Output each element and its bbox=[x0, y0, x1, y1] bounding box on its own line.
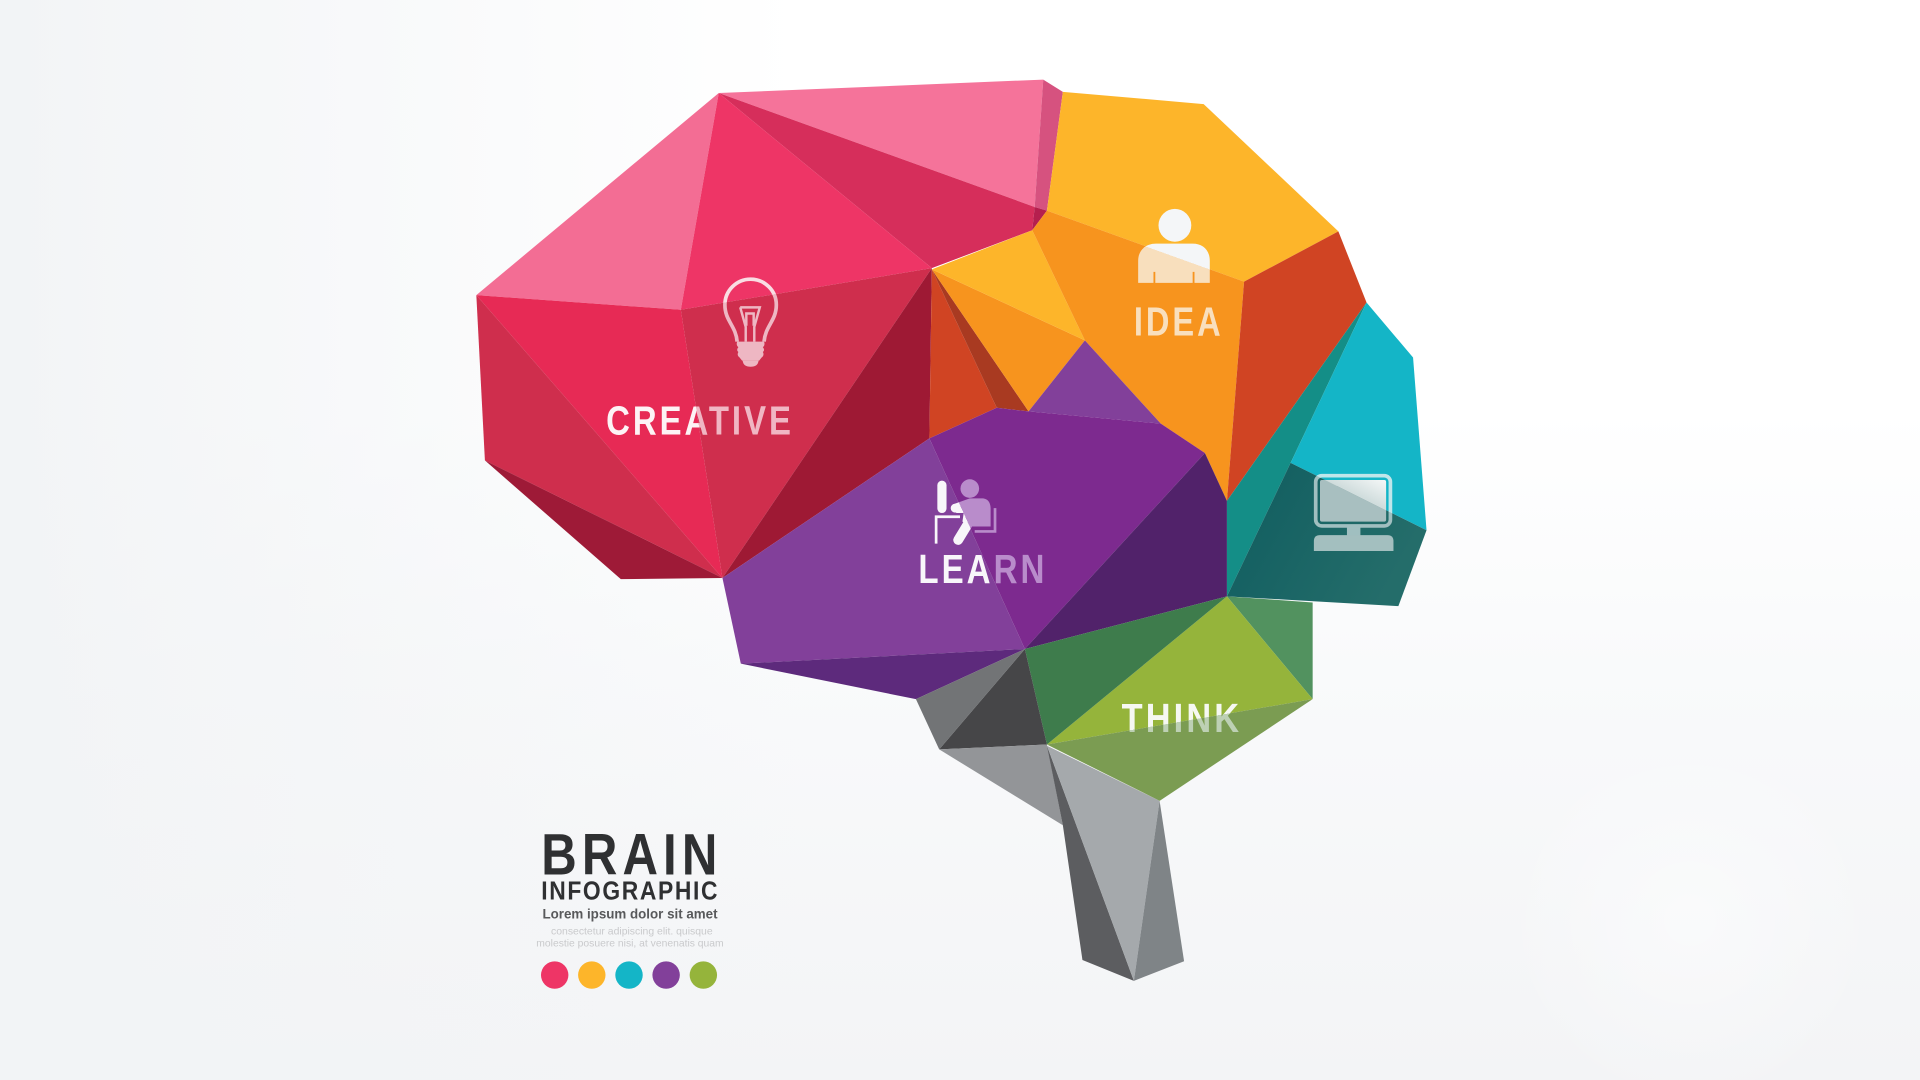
panel: computer lobe bbox=[1227, 302, 1427, 606]
legend dots bbox=[541, 961, 717, 989]
panel: idea lobe bbox=[929, 92, 1367, 501]
icon: person at desk bbox=[936, 479, 995, 544]
panel: learn lobe bbox=[722, 340, 1227, 699]
body text line two: molestie posuere nisi, at venenatis quam bbox=[536, 939, 724, 950]
icon: light bulb bbox=[725, 279, 776, 367]
icon: person bbox=[1138, 209, 1210, 283]
panel: think lobe bbox=[1025, 596, 1313, 801]
body text: consectetur adipiscing elit. quisque bbox=[551, 926, 713, 937]
tagline: Lorem ipsum dolor sit amet bbox=[542, 905, 718, 921]
panel: cerebellum and brain stem bbox=[916, 649, 1184, 981]
label: LEARN: LEARN bbox=[918, 546, 1047, 592]
subtitle: INFOGRAPHIC: INFOGRAPHIC bbox=[541, 877, 719, 905]
panel: creative lobe bbox=[476, 80, 1063, 579]
label: CREATIVE: CREATIVE bbox=[606, 398, 794, 444]
title block bbox=[536, 822, 724, 989]
label: THINK: THINK bbox=[1122, 695, 1242, 741]
title: BRAIN: BRAIN bbox=[541, 822, 722, 887]
icon: desktop computer bbox=[1314, 476, 1393, 551]
label: IDEA: IDEA bbox=[1134, 299, 1224, 345]
